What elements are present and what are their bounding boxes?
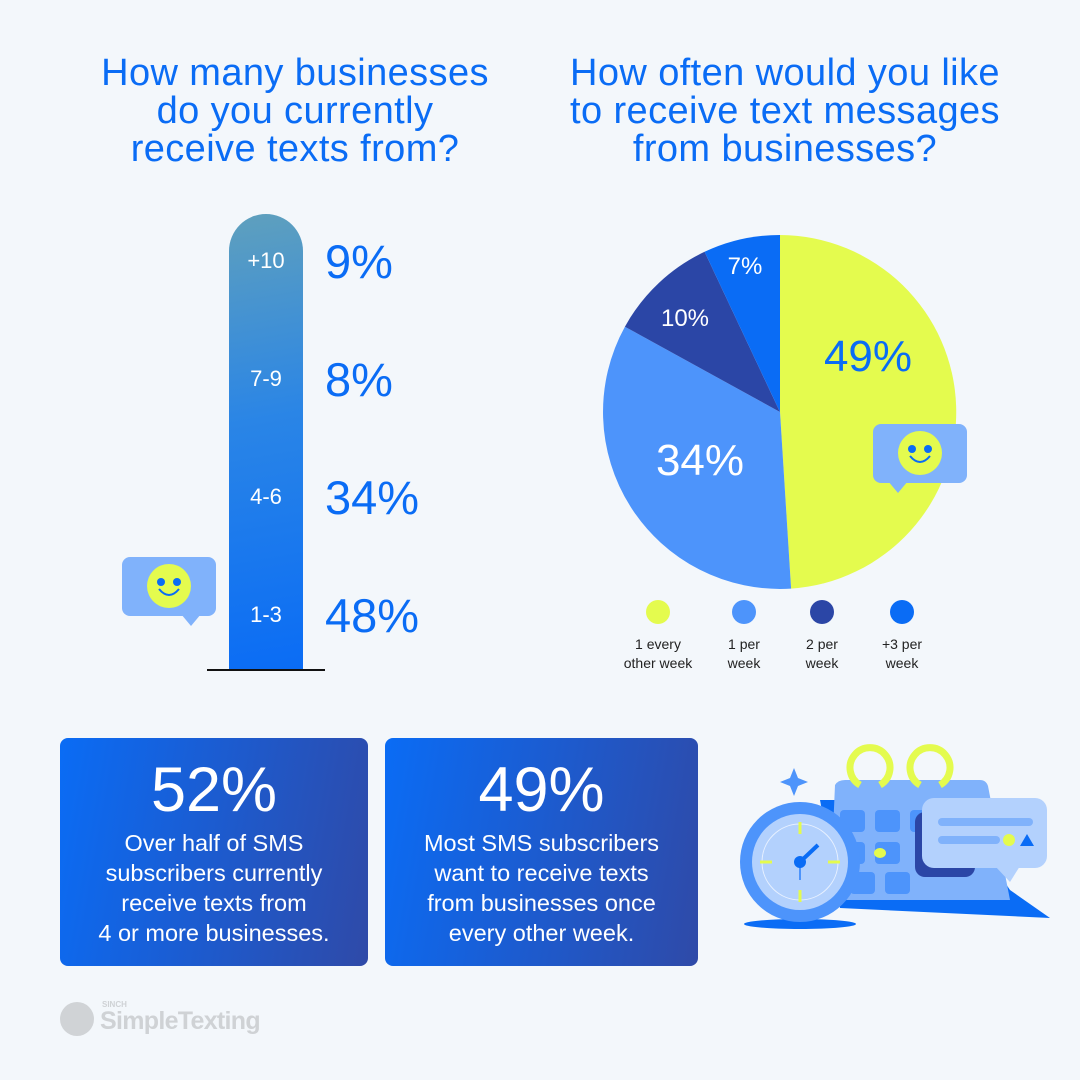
percentages — [325, 235, 419, 642]
stat card 52% — [60, 738, 368, 966]
legend: week — [728, 655, 760, 671]
text: 34% — [325, 471, 419, 524]
pie chart: 7% — [728, 253, 762, 280]
stat card 49%: 49% — [478, 755, 605, 825]
text: 9% — [325, 235, 393, 288]
legend: week — [806, 655, 838, 671]
title: right question — [570, 52, 1000, 170]
legend: week — [886, 655, 918, 671]
stat card 49%: want to receive texts — [434, 860, 649, 886]
pie chart: 34% — [656, 436, 744, 485]
text: 7-9 — [250, 366, 282, 391]
legend: 2 per — [806, 636, 838, 652]
text: 4-6 — [250, 484, 282, 509]
pie chart: 49% — [824, 332, 912, 381]
legend: 1 every — [635, 636, 681, 652]
stat card 52%: Over half of SMS — [125, 830, 303, 856]
logo: SimpleTexting: SINCH — [102, 1000, 127, 1009]
stat card 49%: Most SMS subscribers — [424, 830, 659, 856]
text: 48% — [325, 589, 419, 642]
legend: +3 per — [882, 636, 922, 652]
pie chart — [603, 235, 956, 589]
stat card 52%: receive texts from — [121, 890, 307, 916]
bar chart: businesses count — [207, 214, 325, 671]
text: +10 — [247, 248, 285, 273]
title: left question — [101, 52, 489, 170]
stat card 49%: from businesses once — [427, 890, 656, 916]
text: 8% — [325, 353, 393, 406]
illustration: clock and calendar — [740, 744, 1050, 929]
title: right question: How often would you like — [570, 52, 1000, 94]
legend: 1 per — [728, 636, 760, 652]
icon: smiley chat bubble left — [122, 557, 216, 626]
stat card 52%: 4 or more businesses. — [98, 920, 330, 946]
bar labels — [247, 248, 285, 627]
stat card 49%: every other week. — [449, 920, 634, 946]
title: right question: to receive text messages — [570, 90, 1000, 132]
bar — [229, 214, 303, 670]
text: 1-3 — [250, 602, 282, 627]
title: right question: from businesses? — [633, 128, 937, 170]
logo: SimpleTexting: SimpleTexting — [100, 1007, 260, 1035]
legend — [624, 600, 922, 671]
icon: smiley chat bubble pie — [873, 424, 967, 493]
title: left question: receive texts from? — [131, 128, 459, 170]
pie chart: 10% — [661, 305, 709, 332]
stat card 49% — [385, 738, 698, 966]
stat card 52%: 52% — [151, 755, 277, 825]
baseline — [207, 669, 325, 671]
title: left question: do you currently — [157, 90, 433, 132]
legend: other week — [624, 655, 692, 671]
stat card 52%: subscribers currently — [106, 860, 322, 886]
logo: SimpleTexting — [60, 1000, 260, 1036]
title: left question: How many businesses — [101, 52, 489, 94]
